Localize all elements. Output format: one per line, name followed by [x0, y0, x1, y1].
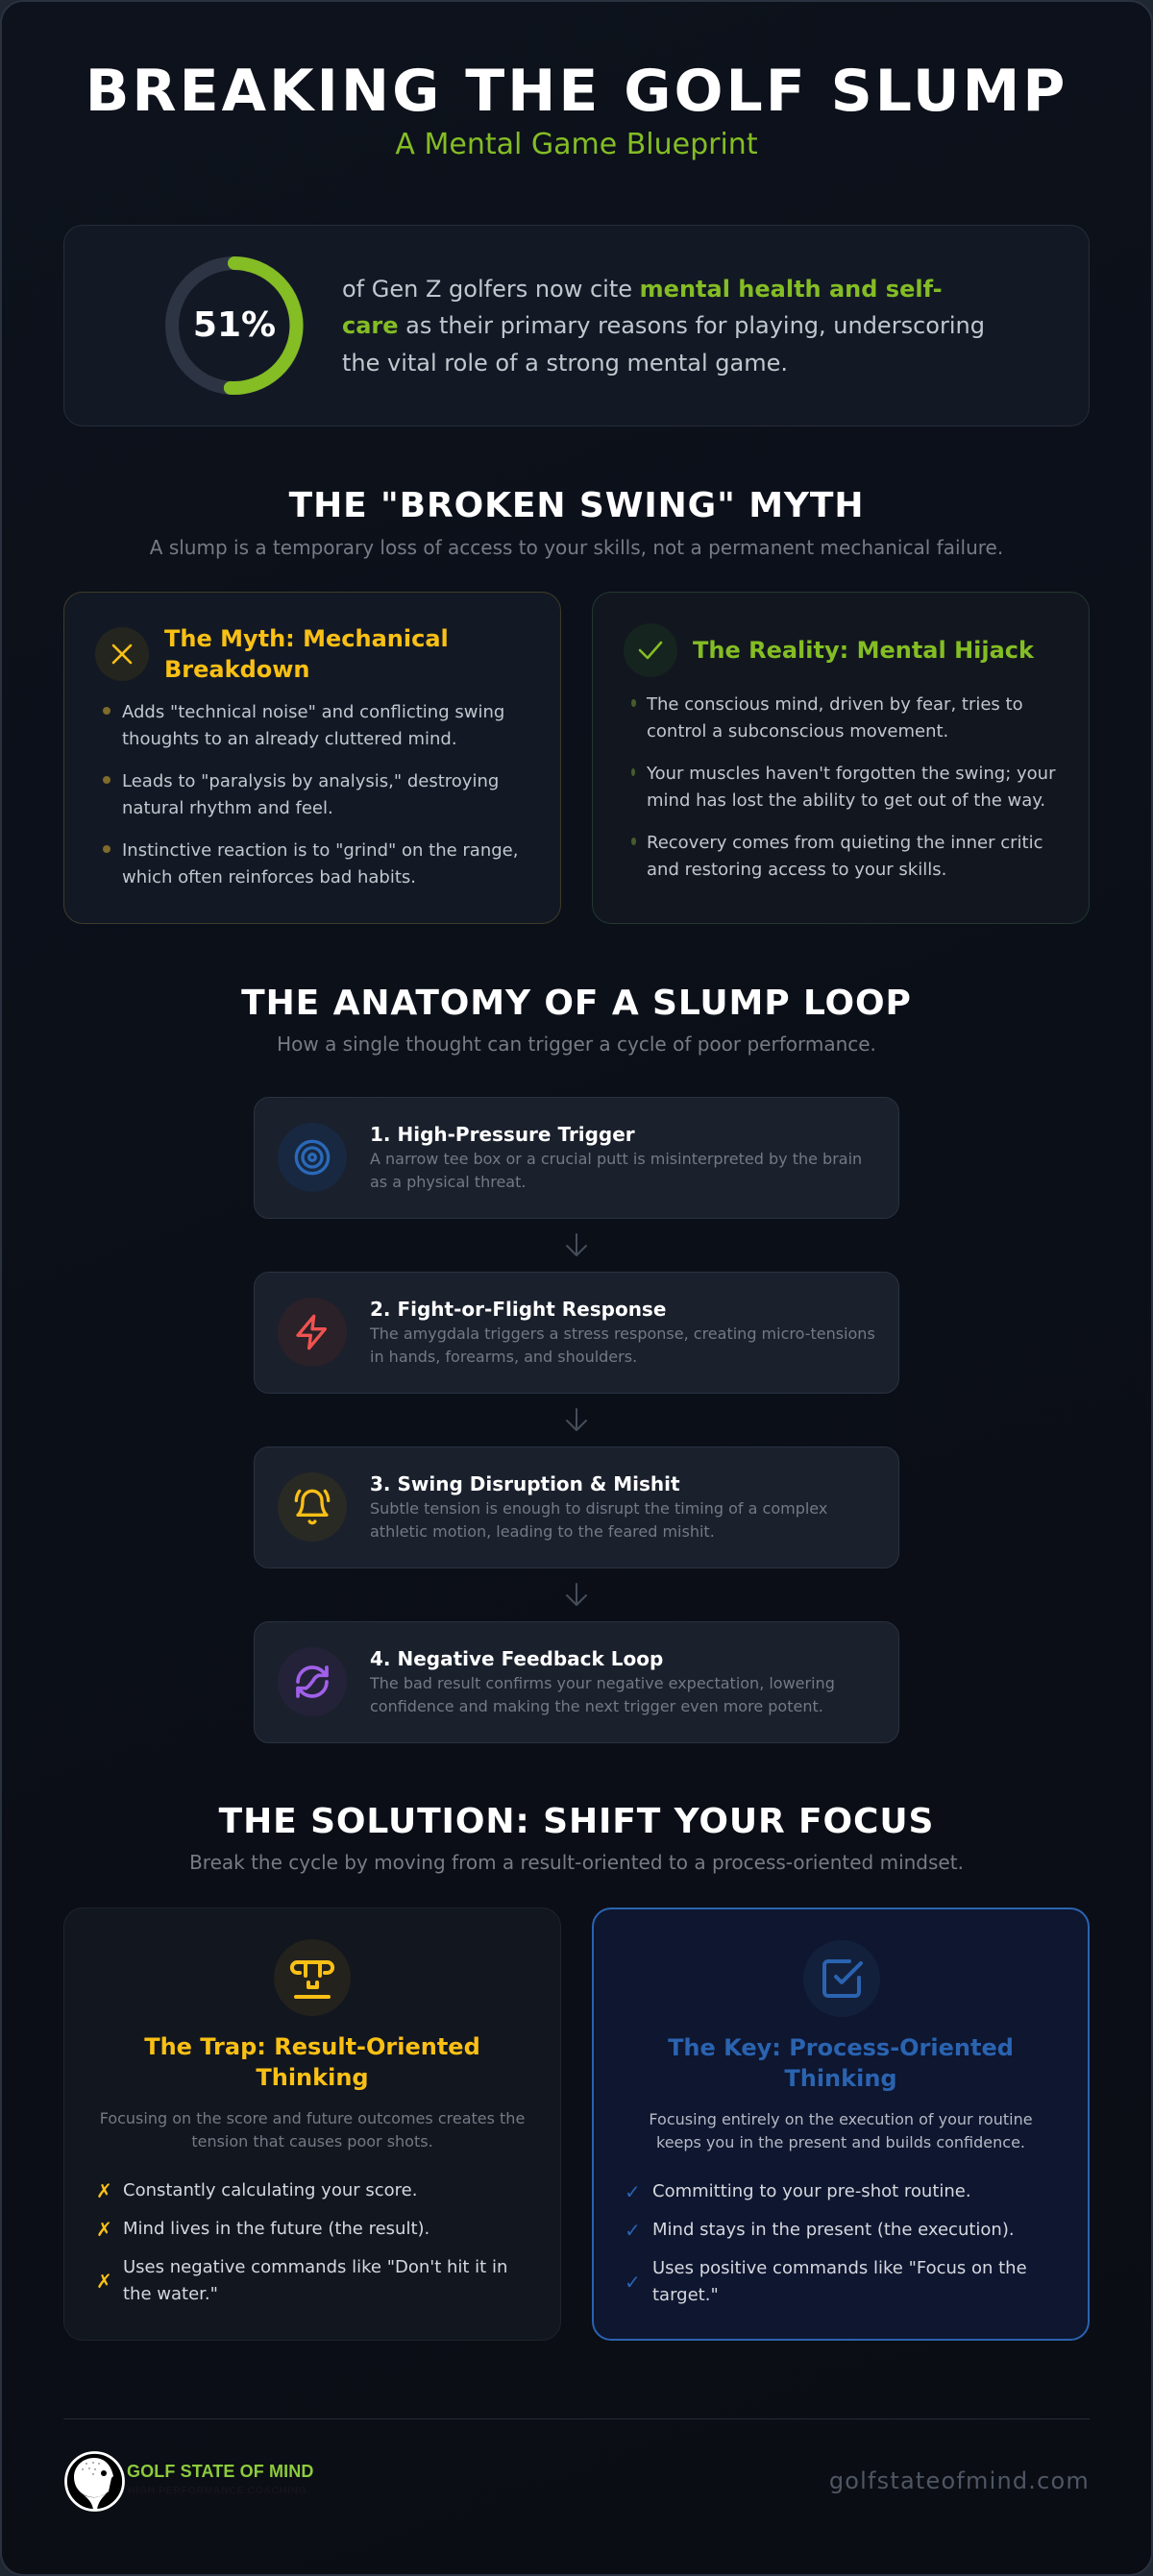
stat description: the vital role of a strong mental game. [342, 350, 788, 377]
step 2 description: in hands, forearms, and shoulders. [370, 1348, 637, 1366]
list text 3: Uses positive commands like "Focus on the [652, 2258, 1027, 2278]
myth title: Breakdown [164, 656, 309, 683]
stat description: of Gen Z golfers now cite mental health and self- [342, 276, 943, 303]
step 1 description: as a physical threat. [370, 1173, 526, 1191]
step 1 description: A narrow tee box or a crucial putt is misinterpreted by the brain [370, 1150, 862, 1168]
list text 3: target." [652, 2285, 719, 2305]
heading: anatomy of a slump loop: THE ANATOMY OF A SLUMP LOOP [241, 984, 912, 1023]
section subtitle: anatomy: How a single thought can trigger a cycle of poor performance. [277, 1033, 876, 1056]
step 2 title: 2. Fight-or-Flight Response [370, 1298, 666, 1321]
logo name: GOLF STATE OF MIND [127, 2462, 313, 2481]
myth title: The Myth: Mechanical [164, 625, 449, 652]
cross mark 3: ✗ [96, 2270, 112, 2293]
bullet text 3 [122, 840, 518, 887]
icon: ringing bell [278, 1472, 347, 1542]
cross mark 1: ✗ [96, 2179, 112, 2202]
step 3 description: Subtle tension is enough to disrupt the timing of a complex [370, 1499, 827, 1518]
bullet text 2: natural rhythm and feel. [122, 798, 333, 818]
step 3 description: athletic motion, leading to the feared mishit. [370, 1522, 715, 1541]
bullet dot 2 [631, 768, 635, 776]
section subtitle: solution: Break the cycle by moving from a result-oriented to a process-oriented mindset. [189, 1851, 964, 1874]
bullet text 1: thoughts to an already cluttered mind. [122, 729, 457, 749]
icon: square check [803, 1940, 880, 2017]
bullet text 1: control a subconscious movement. [647, 721, 948, 741]
step 1 title: 1. High-Pressure Trigger [370, 1123, 635, 1146]
reality title: The Reality: Mental Hijack [693, 637, 1034, 664]
logo: golf state of mind [64, 2451, 313, 2512]
trap title: Thinking [256, 2064, 369, 2091]
trap description: Focusing on the score and future outcomes creates the [100, 2109, 525, 2127]
bullet text 2 [647, 764, 1055, 811]
step 1 card [254, 1097, 899, 1219]
icon: golf ball head on tee [64, 2451, 125, 2512]
icon: loop arrows [278, 1647, 347, 1716]
list text 3 [652, 2258, 1027, 2305]
key description: keeps you in the present and builds confidence. [656, 2133, 1025, 2151]
key title [668, 2034, 1014, 2092]
icon: target [278, 1123, 347, 1192]
arrow 2 [566, 1408, 587, 1431]
chart: 51% donut [165, 256, 304, 395]
list text 3 [123, 2257, 507, 2304]
step 4 description: confidence and making the next trigger even more potent. [370, 1697, 823, 1715]
bullet text 2: mind has lost the ability to get out of the way. [647, 790, 1045, 811]
bullet text 2 [122, 771, 499, 818]
bullet text 1 [646, 694, 1023, 741]
step 4 title: 4. Negative Feedback Loop [370, 1647, 663, 1670]
list text 3: Uses negative commands like "Don't hit it in [123, 2257, 507, 2277]
step 2 card [254, 1272, 899, 1394]
panel: the key [592, 1908, 1090, 2341]
list text 1: Committing to your pre-shot routine. [652, 2181, 971, 2201]
trap description: tension that causes poor shots. [191, 2132, 433, 2151]
step 3 description [370, 1499, 827, 1541]
reality bullets [631, 694, 1055, 880]
stat description [342, 276, 985, 377]
section subtitle: broken swing: A slump is a temporary loss of access to your skills, not a permanent mechanical failure. [150, 536, 1003, 559]
list text 2: Mind lives in the future (the result). [123, 2219, 429, 2239]
stat description: care as their primary reasons for playing, underscoring [342, 312, 985, 339]
trap title [144, 2033, 480, 2091]
list text 3: the water." [123, 2284, 218, 2304]
bullet dot 3 [631, 838, 636, 845]
myth title [164, 625, 449, 683]
stat value: 51% [193, 305, 276, 345]
website url: golfstateofmind.com [829, 2467, 1090, 2494]
step 1 description [370, 1150, 862, 1191]
step 4 description [369, 1674, 835, 1715]
cross mark 2: ✗ [96, 2218, 112, 2241]
bullet text 3: and restoring access to your skills. [647, 860, 946, 880]
logo tagline: HIGH PERFORMANCE COACHING [128, 2485, 307, 2496]
icon: lightning [278, 1298, 347, 1367]
bullet text 1: The conscious mind, driven by fear, tries to [647, 694, 1023, 715]
heading: the solution: THE SOLUTION: SHIFT YOUR FOCUS [219, 1802, 934, 1841]
check mark 3: ✓ [625, 2271, 641, 2294]
panel: the myth [63, 592, 561, 924]
key description [649, 2110, 1033, 2151]
trap title: The Trap: Result-Oriented [144, 2033, 480, 2060]
key description: Focusing entirely on the execution of your routine [649, 2110, 1033, 2128]
step 2 description: The amygdala triggers a stress response, creating micro-tensions [370, 1324, 875, 1343]
key title: Thinking [784, 2065, 897, 2092]
step 3 card [254, 1446, 899, 1568]
check mark 2: ✓ [625, 2219, 641, 2242]
list text 1: Constantly calculating your score. [123, 2180, 417, 2200]
bullet text 3: Instinctive reaction is to "grind" on the range, [122, 840, 518, 861]
heading: broken swing myth: THE "BROKEN SWING" MYTH [289, 486, 864, 525]
key title: The Key: Process-Oriented [668, 2034, 1014, 2061]
bullet dot 1 [103, 707, 110, 715]
bullet text 2: Your muscles haven't forgotten the swing; your [647, 764, 1055, 784]
panel: 51% statistic [63, 225, 1090, 426]
panel: the reality [592, 592, 1090, 924]
bullet text 1 [122, 702, 504, 749]
bullet dot 1 [631, 699, 636, 707]
subtitle: A Mental Game Blueprint [395, 128, 758, 161]
icon: x mark [95, 627, 149, 681]
check mark 1: ✓ [625, 2180, 641, 2203]
bullet text 3: Recovery comes from quieting the inner critic [647, 833, 1043, 853]
icon: trophy [274, 1939, 351, 2016]
trap list [96, 2179, 507, 2304]
step 3 title: 3. Swing Disruption & Mishit [370, 1472, 680, 1495]
panel: the trap [63, 1908, 561, 2341]
key list [625, 2180, 1027, 2305]
trap description [100, 2109, 525, 2151]
step 2 description [369, 1324, 875, 1366]
list text 2: Mind stays in the present (the execution). [652, 2220, 1015, 2240]
bullet text 1: Adds "technical noise" and conflicting swing [122, 702, 504, 722]
title: BREAKING THE GOLF SLUMP [86, 58, 1067, 125]
bullet text 3: which often reinforces bad habits. [122, 867, 416, 887]
bullet dot 3 [103, 845, 110, 853]
arrow 3 [566, 1583, 587, 1606]
bullet text 2: Leads to "paralysis by analysis," destroying [122, 771, 499, 791]
bullet text 3 [647, 833, 1043, 880]
step 4 description: The bad result confirms your negative expectation, lowering [370, 1674, 835, 1692]
icon: check mark [624, 623, 677, 677]
step 4 card [254, 1621, 899, 1743]
bullet dot 2 [103, 776, 110, 784]
arrow 1 [566, 1233, 587, 1256]
myth bullets [103, 702, 518, 887]
